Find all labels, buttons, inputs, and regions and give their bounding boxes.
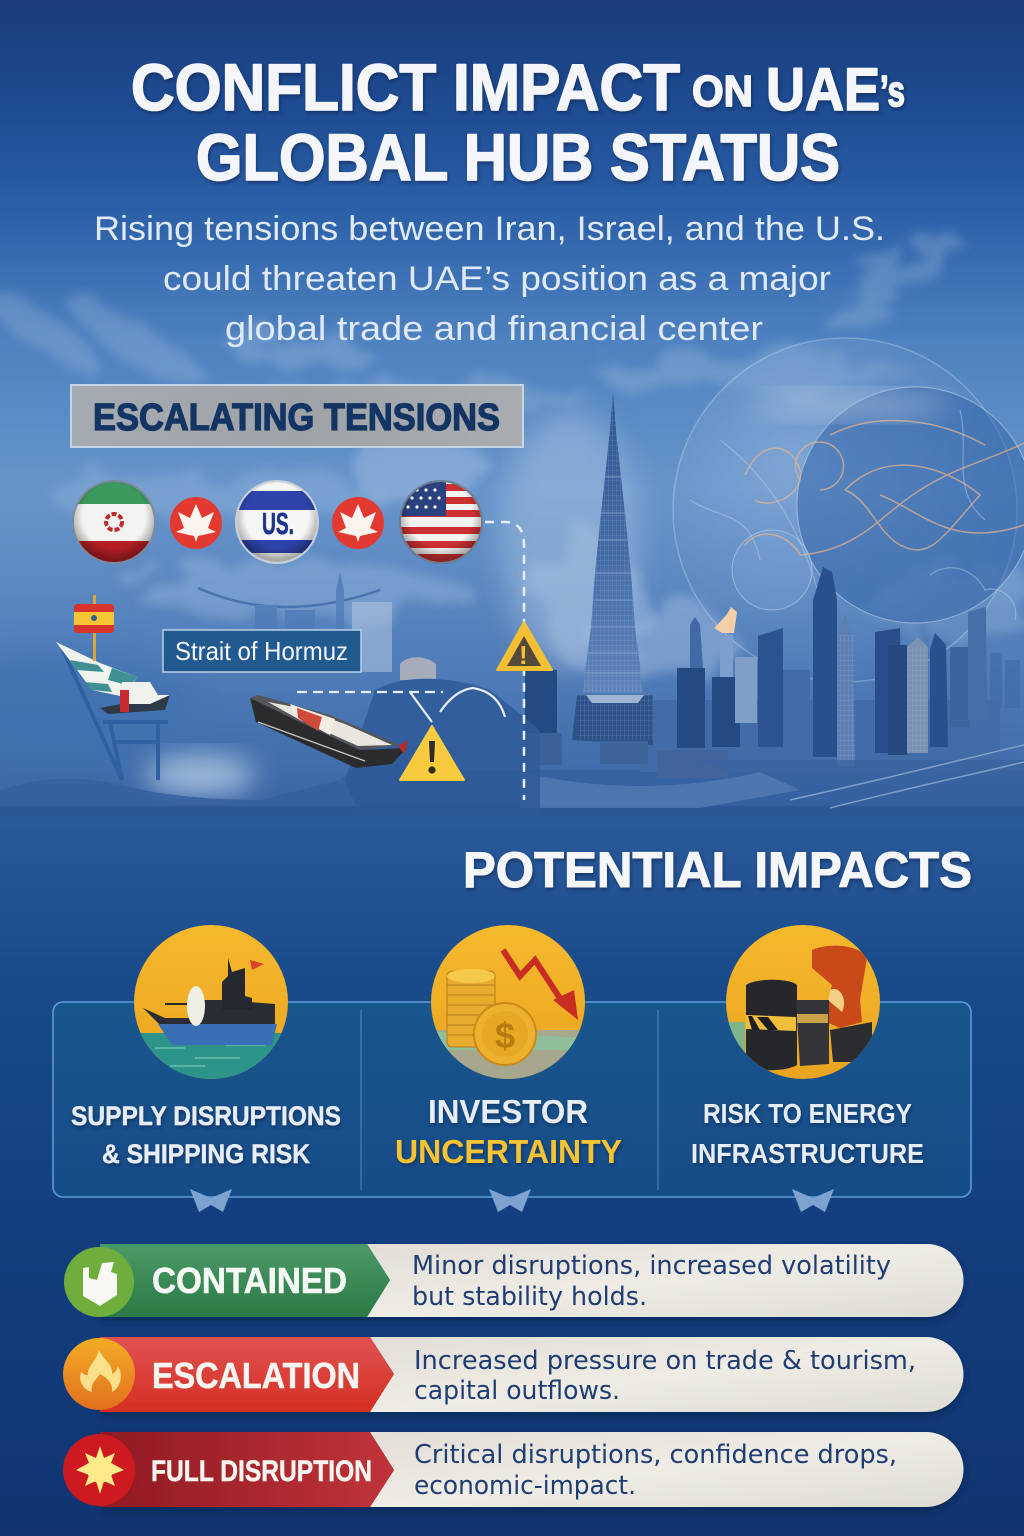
icon: USA flag badge (399, 480, 485, 565)
panel: potential impacts (53, 925, 971, 1212)
background: lower section (0, 815, 1024, 1536)
title: GLOBAL HUB STATUS (196, 120, 840, 194)
scenario row: escalation (63, 1337, 964, 1412)
dashed shipping routes (297, 688, 505, 722)
background: sky (0, 0, 1024, 816)
icon: green shield badge (64, 1247, 134, 1317)
skyline: Burj Khalifa and Dubai towers (520, 393, 1024, 808)
title: UAE (766, 56, 880, 123)
label: full disruption: FULL DISRUPTION (151, 1455, 372, 1488)
description: full disruption (414, 1440, 897, 1501)
distant skyline behind strait (198, 572, 540, 815)
icon: red conflict badge left (170, 497, 222, 549)
label: Strait of Hormuz (163, 630, 361, 672)
illustration: cargo ship (250, 695, 408, 768)
icon: cargo ship circle (130, 925, 295, 1083)
globe network illustration (673, 338, 1024, 682)
description: escalation: capital outflows. (414, 1376, 620, 1406)
text: supply disruptions: & SHIPPING RISK (102, 1139, 310, 1169)
description: full disruption: economic-impact. (414, 1471, 636, 1501)
icon: coins and falling chart circle: $ (495, 1015, 515, 1056)
icon: blue and white US badge: US. (262, 506, 294, 541)
description: escalation: Increased pressure on trade & tourism, (414, 1346, 916, 1376)
text: investor uncertainty (395, 1093, 622, 1170)
icon: ribbon connector middle (489, 1189, 531, 1212)
text: investor uncertainty: UNCERTAINTY (395, 1133, 622, 1170)
icon: coins and falling chart circle (428, 925, 590, 1082)
icon: flame badge (63, 1338, 135, 1410)
banner: escalating tensions: ESCALATING TENSIONS (93, 397, 500, 439)
icon: ribbon connector left (190, 1189, 232, 1212)
heading: potential impacts: POTENTIAL IMPACTS (463, 842, 972, 898)
icon: Iran flag badge (70, 480, 160, 565)
description: contained: but stability holds. (412, 1282, 647, 1312)
title: ON (692, 67, 753, 116)
title: ’s (880, 67, 905, 116)
icon: warning triangle upper (497, 622, 552, 670)
text: supply disruptions (71, 1101, 341, 1169)
title: CONFLICT IMPACT (131, 50, 680, 124)
text: risk to energy infrastructure: INFRASTRUCTURE (691, 1138, 924, 1169)
text: supply disruptions: SUPPLY DISRUPTIONS (71, 1101, 341, 1131)
text: risk to energy infrastructure: RISK TO ENERGY (703, 1098, 912, 1129)
text: risk to energy infrastructure (691, 1098, 924, 1169)
label: contained: CONTAINED (152, 1260, 347, 1301)
icon: warning triangle upper: ! (519, 640, 528, 670)
background: clouds (0, 219, 1024, 816)
text: investor uncertainty: INVESTOR (428, 1093, 588, 1130)
scenario row: contained (64, 1244, 964, 1317)
scenario row: full disruption (63, 1432, 964, 1507)
icon: tower platform with flags and boat (56, 595, 170, 780)
label: Strait of Hormuz: Strait of Hormuz (175, 636, 348, 666)
icon: warning triangle lower (400, 726, 464, 780)
description: escalation (414, 1346, 916, 1406)
subtitle: could threaten UAE’s position as a major (163, 260, 831, 298)
icon: ribbon connector right (792, 1189, 834, 1212)
dashed route to warning (485, 522, 524, 800)
description: contained: Minor disruptions, increased volatility (412, 1251, 891, 1281)
icon: barrels and flame creature circle (725, 925, 880, 1079)
banner: escalating tensions (71, 385, 523, 447)
subtitle (94, 210, 885, 348)
icon: red conflict badge right (332, 497, 384, 549)
subtitle: Rising tensions between Iran, Israel, and the U.S. (94, 210, 885, 248)
title (131, 50, 905, 194)
label: escalation: ESCALATION (152, 1355, 360, 1396)
icon: burst badge (63, 1434, 135, 1506)
subtitle: global trade and financial center (225, 310, 763, 348)
description: contained (412, 1251, 891, 1312)
icon: blue and white US badge (235, 480, 319, 564)
description: full disruption: Critical disruptions, confidence drops, (414, 1440, 897, 1470)
